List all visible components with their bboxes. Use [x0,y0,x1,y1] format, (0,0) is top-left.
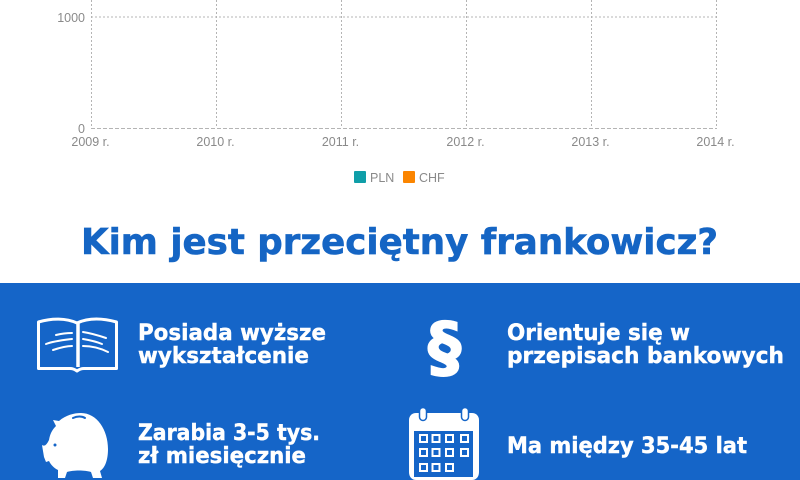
x axis labels: 2014 r. [696,135,735,149]
x axis labels: 2009 r. [71,135,110,149]
text: education [138,321,326,369]
text: education: wykształcenie [138,344,309,369]
y axis labels: 0 [78,122,85,136]
text: banking regulations: Orientuje się w [507,321,690,346]
x axis labels [71,135,735,149]
text: income: zł miesięcznie [138,444,306,469]
x axis labels: 2010 r. [196,135,235,149]
title: Kim jest przeciętny frankowicz? [81,222,718,263]
x axis labels: 2011 r. [322,135,359,149]
icon: paragraph sign: § [428,308,461,386]
icon: calendar [409,408,479,480]
chart legend [354,171,445,185]
text: income [138,421,320,469]
chart legend: CHF [419,171,445,185]
line chart axes and grid [57,0,735,149]
panel: profile of the average borrower [0,283,800,480]
icon: piggy bank [42,413,108,478]
text: banking regulations [507,321,784,369]
chart legend: PLN [370,171,394,185]
text: education: Posiada wyższe [138,321,326,346]
text: banking regulations: przepisach bankowych [507,344,784,369]
icon: open book [38,319,116,371]
y axis labels [57,11,85,136]
y axis labels: 1000 [57,11,85,25]
x axis labels: 2012 r. [446,135,485,149]
text: age: Ma między 35-45 lat [507,434,747,459]
text: income: Zarabia 3-5 tys. [138,421,320,446]
x axis labels: 2013 r. [571,135,610,149]
